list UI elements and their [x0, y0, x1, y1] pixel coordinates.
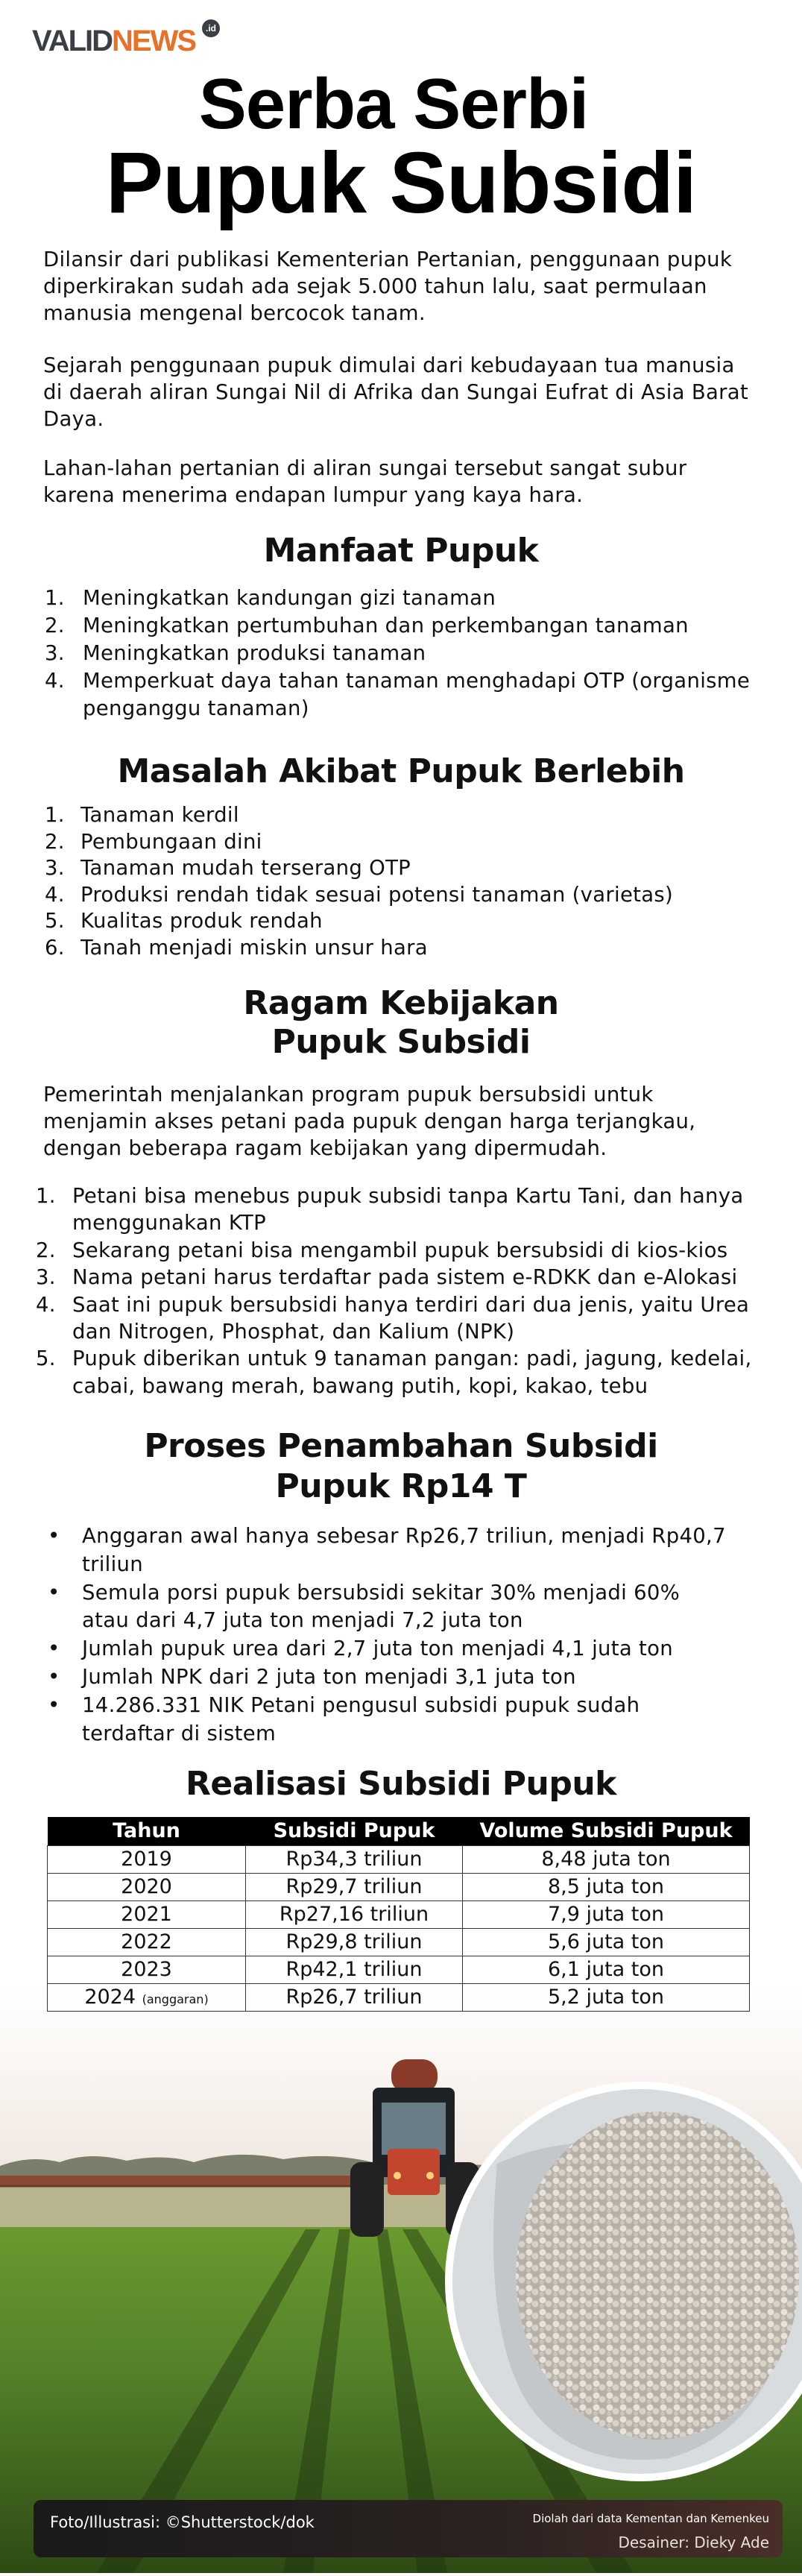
- list: masalah: 2.: [45, 830, 65, 854]
- logo: .id: [206, 23, 216, 34]
- list: proses bullets: Anggaran awal hanya sebesar Rp26,7 triliun, menjadi Rp40,7: [82, 1524, 726, 1548]
- list: masalah: 3.: [45, 856, 65, 880]
- heading: Ragam Kebijakan: [243, 984, 559, 1061]
- list: proses bullets: •: [48, 1581, 60, 1605]
- boom: [0, 2176, 350, 2186]
- list: proses bullets: Jumlah pupuk urea dari 2,7 juta ton menjadi 4,1 juta ton: [82, 1637, 673, 1660]
- intro text: manusia mengenal bercocok tanam.: [43, 301, 426, 325]
- list: masalah: Kualitas produk rendah: [80, 909, 323, 933]
- footer credits bar: Desainer: Dieky Ade: [618, 2534, 769, 2551]
- table: realisasi: Rp34,3 triliun: [285, 1848, 422, 1871]
- heading: Masalah: Masalah Akibat Pupuk Berlebih: [117, 752, 685, 790]
- list: kebijakan: Pupuk diberikan untuk 9 tanaman pangan: padi, jagung, kedelai,: [72, 1347, 751, 1370]
- list: masalah: Tanaman kerdil: [80, 803, 239, 827]
- heading: Ragam Kebijakan: Pupuk Subsidi: [272, 1023, 530, 1061]
- footer credits bar: [34, 2500, 783, 2557]
- list: masalah: 5.: [45, 909, 65, 933]
- heading: Proses Penambahan: [144, 1427, 658, 1505]
- logo: VALIDNEWS: [32, 25, 195, 57]
- list: kebijakan: 4.: [36, 1293, 56, 1317]
- list: manfaat: Memperkuat daya tahan tanaman menghadapi OTP (organisme: [83, 669, 750, 693]
- table: realisasi: 2024 (anggaran): [84, 1985, 209, 2009]
- photo background: [0, 2041, 802, 2573]
- intro text: [43, 248, 748, 507]
- list: manfaat: 4.: [45, 669, 65, 693]
- text: ragam intro: dengan beberapa ragam kebijakan yang dipermudah.: [43, 1136, 607, 1160]
- list: proses bullets: •: [48, 1665, 60, 1689]
- table: realisasi: Rp26,7 triliun: [285, 1985, 422, 2009]
- list: kebijakan: Sekarang petani bisa mengambil pupuk bersubsidi di kios-kios: [72, 1238, 727, 1262]
- table: realisasi: 2023: [121, 1958, 172, 1981]
- title: Pupuk Subsidi: [106, 134, 696, 231]
- heading: Proses Penambahan: Pupuk Rp14 T: [276, 1467, 526, 1505]
- list: manfaat: 2.: [45, 614, 65, 637]
- table: realisasi: 2019: [121, 1848, 172, 1871]
- table: realisasi: 8,48 juta ton: [541, 1848, 671, 1871]
- table: realisasi: 2022: [121, 1930, 172, 1953]
- list: kebijakan: [36, 1184, 751, 1398]
- table: realisasi: 2020: [121, 1875, 172, 1898]
- list: masalah: Tanaman mudah terserang OTP: [80, 856, 411, 880]
- table: realisasi: 5,6 juta ton: [548, 1930, 664, 1953]
- title: [106, 64, 696, 231]
- list: masalah: 6.: [45, 936, 65, 960]
- list: proses bullets: •: [48, 1693, 60, 1717]
- list: proses bullets: [48, 1524, 726, 1745]
- intro text: Daya.: [43, 407, 104, 431]
- list: kebijakan: dan Nitrogen, Phosphat, dan Kalium (NPK): [72, 1320, 514, 1344]
- text: ragam intro: Pemerintah menjalankan program pupuk bersubsidi untuk: [43, 1083, 654, 1106]
- list: proses bullets: 14.286.331 NIK Petani pengusul subsidi pupuk sudah: [82, 1693, 640, 1717]
- list: proses bullets: terdaftar di sistem: [82, 1722, 276, 1745]
- table: realisasi: Subsidi Pupuk: [274, 1819, 435, 1842]
- intro text: karena menerima endapan lumpur yang kaya hara.: [43, 483, 583, 507]
- table: realisasi: Rp29,8 triliun: [285, 1930, 422, 1953]
- list: manfaat: Meningkatkan pertumbuhan dan perkembangan tanaman: [83, 614, 689, 637]
- title: Serba Serbi: [199, 64, 588, 144]
- list: proses bullets: atau dari 4,7 juta ton menjadi 7,2 juta ton: [82, 1608, 523, 1632]
- list: kebijakan: 3.: [36, 1265, 56, 1289]
- list: proses bullets: •: [48, 1637, 60, 1660]
- list: proses bullets: Semula porsi pupuk bersubsidi sekitar 30% menjadi 60%: [82, 1581, 680, 1605]
- list: proses bullets: Jumlah NPK dari 2 juta ton menjadi 3,1 juta ton: [82, 1665, 576, 1689]
- table: realisasi: 8,5 juta ton: [548, 1875, 664, 1898]
- intro text: diperkirakan sudah ada sejak 5.000 tahun lalu, saat permulaan: [43, 274, 707, 298]
- table: realisasi: 2021: [121, 1903, 172, 1926]
- list: kebijakan: Saat ini pupuk bersubsidi hanya terdiri dari dua jenis, yaitu Urea: [72, 1293, 749, 1317]
- heading: Manfaat Pupuk: Manfaat Pupuk: [264, 532, 538, 570]
- list: proses bullets: •: [48, 1524, 60, 1548]
- table: realisasi: [47, 1817, 750, 2012]
- table: realisasi: Tahun: [113, 1819, 180, 1842]
- field: [0, 2227, 802, 2573]
- list: masalah: Pembungaan dini: [80, 830, 262, 854]
- intro text: di daerah aliran Sungai Nil di Afrika dan Sungai Eufrat di Asia Barat: [43, 380, 748, 404]
- list: kebijakan: 5.: [36, 1347, 56, 1370]
- text: ragam intro: [43, 1083, 695, 1160]
- list: manfaat: 1.: [45, 586, 65, 610]
- list: kebijakan: Nama petani harus terdaftar pada sistem e-RDKK dan e-Alokasi: [72, 1265, 738, 1289]
- table: realisasi: 6,1 juta ton: [548, 1958, 664, 1981]
- list: kebijakan: Petani bisa menebus pupuk subsidi tanpa Kartu Tani, dan hanya: [72, 1184, 744, 1208]
- table: realisasi: Rp27,16 triliun: [280, 1903, 429, 1926]
- heading: Realisasi: Realisasi Subsidi Pupuk: [186, 1765, 616, 1803]
- list: manfaat: Meningkatkan produksi tanaman: [83, 641, 426, 665]
- table: realisasi: Rp42,1 triliun: [285, 1958, 422, 1981]
- table: realisasi: 5,2 juta ton: [548, 1985, 664, 2009]
- table: realisasi: Rp29,7 triliun: [285, 1875, 422, 1898]
- list: masalah: 4.: [45, 883, 65, 907]
- intro text: Dilansir dari publikasi Kementerian Pertanian, penggunaan pupuk: [43, 248, 732, 271]
- footer credits bar: Diolah dari data Kementan dan Kemenkeu: [533, 2512, 769, 2525]
- list: masalah: Produksi rendah tidak sesuai potensi tanaman (varietas): [80, 883, 673, 907]
- heading: Ragam Kebijakan: Ragam Kebijakan: [243, 984, 559, 1022]
- footer credits bar: Foto/Illustrasi: ©Shutterstock/dok: [50, 2513, 315, 2531]
- list: masalah: Tanah menjadi miskin unsur hara: [80, 936, 428, 960]
- list: manfaat: 3.: [45, 641, 65, 665]
- list: masalah: 1.: [45, 803, 65, 827]
- tractor: [350, 2059, 479, 2237]
- table: realisasi: Volume Subsidi Pupuk: [479, 1819, 733, 1842]
- list: masalah: [45, 803, 673, 960]
- intro text: Sejarah penggunaan pupuk dimulai dari kebudayaan tua manusia: [43, 353, 735, 377]
- table: realisasi: 7,9 juta ton: [548, 1903, 664, 1926]
- list: manfaat: Meningkatkan kandungan gizi tanaman: [83, 586, 496, 610]
- list: kebijakan: 2.: [36, 1238, 56, 1262]
- intro text: Lahan-lahan pertanian di aliran sungai tersebut sangat subur: [43, 456, 686, 480]
- list: manfaat: penganggu tanaman): [83, 696, 309, 720]
- list: manfaat: [45, 586, 750, 720]
- fertilizer bag photo: [445, 2082, 802, 2481]
- list: kebijakan: cabai, bawang merah, bawang putih, kopi, kakao, tebu: [72, 1374, 648, 1398]
- list: kebijakan: 1.: [36, 1184, 56, 1208]
- tree line: [0, 2155, 522, 2192]
- heading: Proses Penambahan: Proses Penambahan Subsidi: [144, 1427, 658, 1465]
- text: ragam intro: menjamin akses petani pada pupuk dengan harga terjangkau,: [43, 1109, 695, 1133]
- list: proses bullets: triliun: [82, 1552, 143, 1576]
- list: kebijakan: menggunakan KTP: [72, 1211, 266, 1235]
